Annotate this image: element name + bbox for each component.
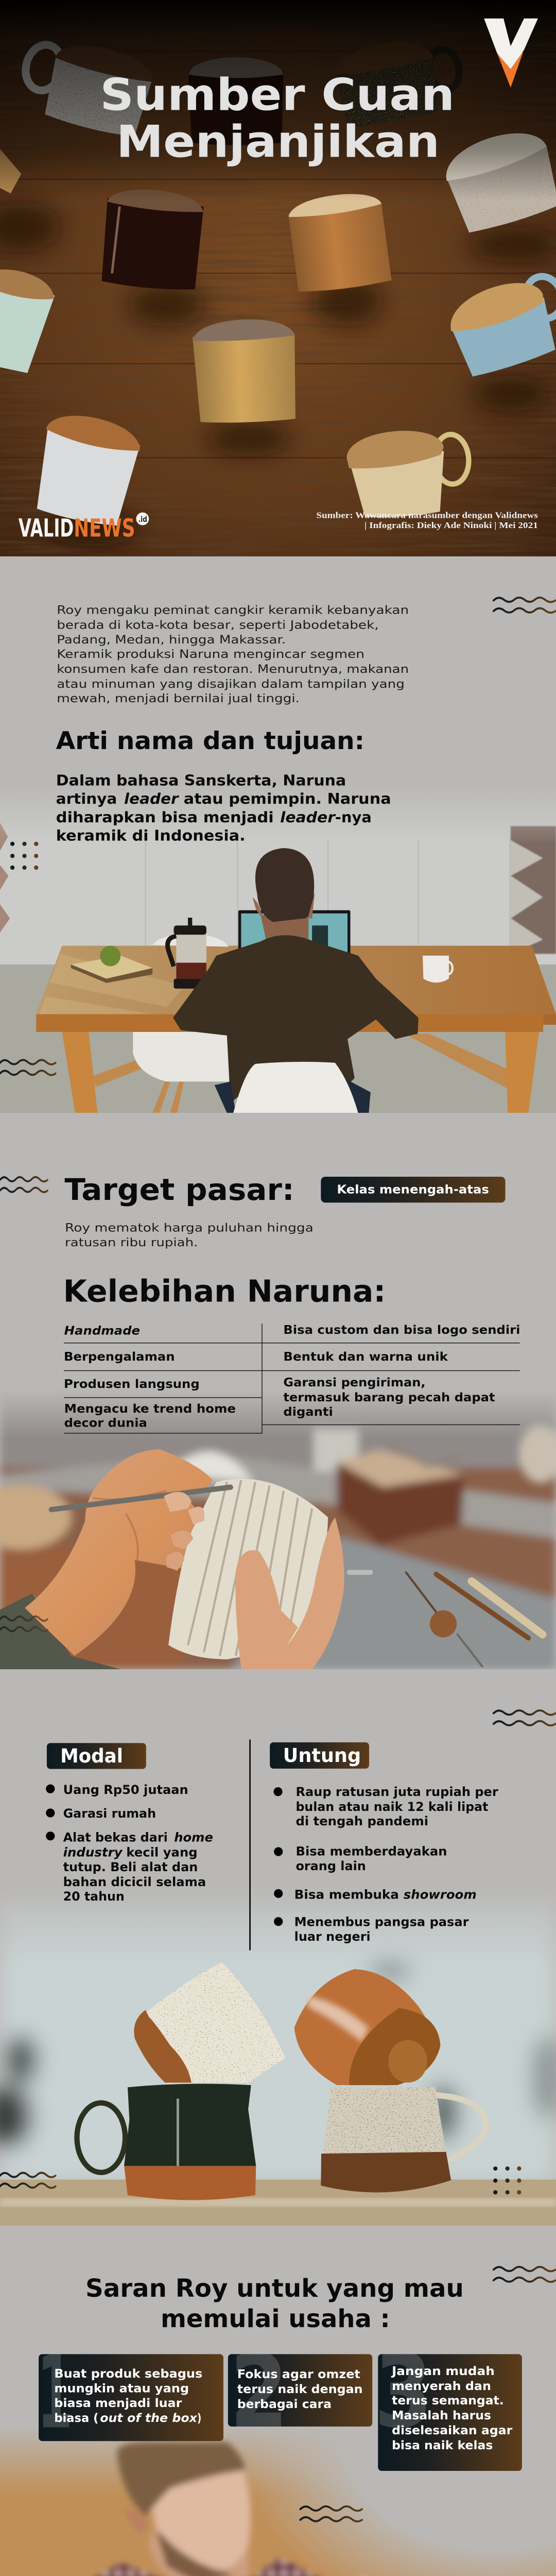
tip card 1: ) [197, 2412, 201, 2425]
tip card 1: biasa menjadi luar [54, 2397, 182, 2410]
heading: arti nama: Arti nama dan tujuan: [56, 727, 364, 755]
mug: white dark-top [15, 30, 158, 141]
tip card 3: diselesaikan agar [392, 2424, 513, 2437]
price text [65, 1222, 314, 1249]
sleeve [0, 1594, 120, 1669]
intro text [57, 604, 409, 705]
green mug [77, 2084, 256, 2200]
title [100, 70, 455, 167]
bold paragraph: artinya [56, 790, 117, 807]
untung list: Menembus pangsa pasar [294, 1915, 469, 1929]
badge: kelas [321, 1177, 506, 1202]
title: Sumber Cuan [100, 70, 455, 121]
badge: untung [270, 1742, 369, 1769]
tip card 3: menyerah dan [392, 2380, 491, 2393]
modal list: home [174, 1831, 213, 1845]
tip card 2: terus naik dengan [237, 2383, 363, 2396]
advantages table: Berpengalaman [64, 1349, 175, 1364]
wall pattern right [511, 826, 556, 954]
untung list: di tengah pandemi [296, 1814, 428, 1828]
tip card 1: 1 [37, 2334, 73, 2451]
tip card 3: 3 [374, 2333, 432, 2451]
orange cup [294, 1969, 440, 2085]
bold paragraph: diharapkan bisa menjadi [56, 809, 274, 826]
divider [249, 1739, 251, 1951]
wave decoration left [0, 1177, 47, 1192]
bold paragraph: atau pemimpin. Naruna [184, 790, 391, 807]
modal list: Uang Rp50 jutaan [63, 1783, 188, 1797]
tip card 1: biasa ( [54, 2412, 98, 2425]
advantages table: Bisa custom dan bisa logo sendiri [283, 1323, 520, 1337]
modal list [46, 1783, 213, 1904]
advantages table: termasuk barang pecah dapat [283, 1390, 495, 1404]
person [173, 848, 419, 1113]
untung list: Bisa memberdayakan [296, 1844, 447, 1859]
tip card 1 [39, 2354, 223, 2441]
wooden table [0, 2179, 556, 2226]
bold paragraph: -nya [335, 809, 372, 826]
source credit [316, 511, 538, 530]
intro text: Padang, Medan, hingga Makassar. [57, 634, 286, 647]
modal list: industry [63, 1845, 123, 1860]
mug shadows [0, 202, 556, 547]
tip card 2: berbagai cara [237, 2398, 332, 2411]
intro text: mewah, menjadi bernilai jual tinggi. [57, 692, 300, 705]
top darkening [0, 0, 556, 556]
bold paragraph [56, 772, 391, 844]
tip card 2: Fokus agar omzet [237, 2368, 360, 2381]
logo: V mark [484, 19, 538, 88]
fluted cup [168, 1479, 328, 1659]
speckled white cup [134, 1962, 285, 2082]
advantages table: Produsen langsung [64, 1377, 200, 1391]
wave decoration [494, 2267, 555, 2282]
bold paragraph: leader [124, 790, 180, 807]
untung list [273, 1785, 498, 1944]
tip card 2 [228, 2354, 373, 2427]
laptop [238, 910, 351, 956]
panel: hero [0, 0, 556, 556]
left hand [25, 1449, 213, 1656]
chair behind [133, 935, 231, 1081]
title: Menjanjikan [116, 116, 440, 167]
wave decoration [494, 598, 555, 613]
workshop background [0, 1382, 556, 1669]
panel: modal dan untung [0, 1709, 556, 2226]
badge: kelas: Kelas menengah-atas [337, 1183, 489, 1196]
dot grid [493, 2166, 521, 2194]
intro text: Roy mengaku peminat cangkir keramik kebanyakan [57, 604, 409, 617]
advantages table: Mengacu ke trend home [64, 1401, 236, 1416]
advantages table: diganti [283, 1404, 333, 1419]
badge: modal [47, 1743, 146, 1769]
tip card 3 [378, 2354, 522, 2471]
mug: pale right [439, 123, 556, 237]
fingers and right hand [164, 1492, 344, 1669]
tip card 1: out of the box [100, 2412, 198, 2425]
bold paragraph: leader [280, 809, 336, 826]
price text: ratusan ribu rupiah. [65, 1236, 198, 1249]
tip card 3: Masalah harus [392, 2409, 491, 2422]
dot grid [10, 842, 38, 870]
tip card 1: mungkin atau yang [54, 2382, 189, 2396]
engraving tool [51, 1487, 231, 1510]
mug: white bottom left [29, 409, 145, 530]
chair front [233, 1062, 358, 1113]
tip card 2: 2 [230, 2333, 288, 2451]
tip card 3: terus semangat. [392, 2394, 504, 2408]
logo: Validnews: NEWS [74, 514, 135, 543]
modal list: 20 tahun [63, 1889, 125, 1904]
mug: mint left [0, 263, 58, 375]
logo: Validnews: VALID [19, 514, 74, 543]
mug: yellow [192, 318, 298, 424]
wave decoration left [0, 2173, 56, 2188]
price text: Roy mematok harga puluhan hingga [65, 1222, 314, 1235]
modal list: kecil yang [126, 1845, 198, 1860]
untung list: Raup ratusan juta rupiah per [296, 1785, 498, 1799]
advantages table [64, 1323, 520, 1433]
logo: Validnews: .id [138, 515, 147, 524]
misty backdrop [0, 1900, 556, 2184]
mug: dark glaze top centre [188, 57, 283, 145]
panel: target pasar [0, 1172, 556, 1669]
mug: blue [442, 268, 556, 381]
modal list: Garasi rumah [63, 1806, 156, 1821]
table [36, 946, 556, 1113]
intro text: konsumen kafe dan restoran. Menurutnya, makanan [57, 663, 409, 676]
tip card 3: bisa naik kelas [392, 2439, 493, 2452]
panel: arti nama [0, 597, 556, 1113]
french press [168, 918, 206, 989]
advantages table: Handmade [64, 1323, 140, 1337]
white cup [423, 956, 453, 982]
untung list: showroom [404, 1888, 477, 1902]
advantages table: Garansi pengiriman, [283, 1375, 426, 1389]
wave decoration lower [0, 1616, 47, 1632]
advantages table: decor dunia [64, 1416, 147, 1430]
mug: fragment left [0, 149, 21, 193]
tip card 3: Jangan mudah [391, 2365, 495, 2378]
blurred person [46, 2442, 372, 2576]
badge: modal: Modal [60, 1744, 123, 1767]
modal list: tutup. Beli alat dan [63, 1860, 198, 1874]
wave decoration centre [300, 2506, 362, 2521]
wave decoration [494, 1710, 555, 1725]
untung list: bulan atau naik 12 kali lipat [296, 1800, 488, 1814]
wave decoration left [0, 1060, 56, 1075]
speckled mug [321, 2087, 486, 2192]
modal list: bahan dicicil selama [63, 1875, 206, 1889]
logo: Validnews [19, 513, 149, 543]
tip card 1: Buat produk sebagus [54, 2367, 202, 2381]
bold paragraph: Dalam bahasa Sanskerta, Naruna [56, 772, 346, 789]
panel: saran roy [0, 2266, 556, 2576]
mug: dark brown [100, 186, 205, 292]
heading: saran roy: memulai usaha : [161, 2304, 390, 2333]
mug: dark green top right [331, 31, 466, 130]
book and apple [71, 946, 152, 983]
source credit: | Infografis: Dieky Ade Ninoki | Mei 2021 [364, 520, 538, 530]
source credit: Sumber: Wawancara narasumber dengan Validnews [316, 511, 538, 520]
mug: orange speckled [287, 190, 392, 294]
modal list: Alat bekas dari [63, 1831, 168, 1845]
untung list: orang lain [296, 1859, 366, 1873]
badge: untung: Untung [283, 1744, 361, 1767]
advantages table: Bentuk dan warna unik [283, 1349, 448, 1364]
heading: target pasar: Target pasar: [64, 1172, 294, 1207]
intro text: Keramik produksi Naruna mengincar segmen [57, 648, 364, 661]
heading: kelebihan: Kelebihan Naruna: [63, 1273, 386, 1309]
intro text: berada di kota-kota besar, seperti Jabodetabek, [57, 619, 379, 632]
intro text: atau minuman yang disajikan dalam tampilan yang [57, 678, 405, 691]
untung list: luar negeri [294, 1929, 371, 1944]
heading: saran roy [85, 2274, 464, 2333]
mug: cream with handle [345, 426, 472, 520]
heading: saran roy: Saran Roy untuk yang mau [85, 2274, 464, 2303]
tools on table [349, 1572, 543, 1666]
bold paragraph: keramik di Indonesia. [56, 827, 246, 844]
untung list: Bisa membuka [294, 1888, 399, 1902]
